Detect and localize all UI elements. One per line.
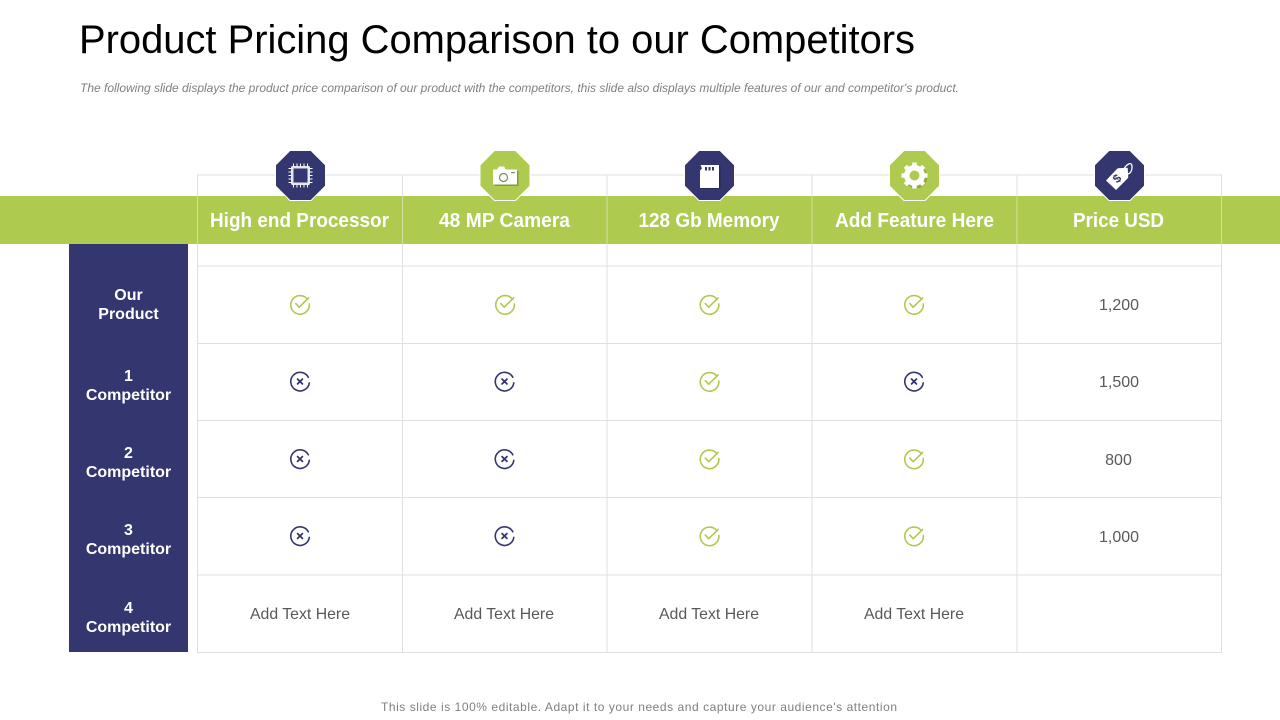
row: competitor 2 checks bbox=[700, 450, 923, 469]
footer note: This slide is 100% editable. Adapt it to your needs and capture your audience's attention bbox=[381, 700, 897, 714]
icon: price tag bbox=[1094, 150, 1144, 200]
table grid bbox=[198, 175, 1222, 652]
icon: gear bbox=[890, 150, 940, 200]
icon: price tag: $ bbox=[1110, 171, 1125, 186]
row label: competitor 1: 1 bbox=[124, 368, 133, 385]
row label: competitor 1: Competitor bbox=[86, 387, 171, 404]
row: our product marks bbox=[291, 296, 923, 314]
price: competitor 3: 1,000 bbox=[1099, 529, 1139, 546]
row: competitor 4 text: Add Text Here bbox=[454, 606, 554, 623]
row label: competitor 4: 4 bbox=[124, 600, 133, 617]
row label: our product: Product bbox=[98, 306, 159, 323]
row: competitor 4 text: Add Text Here bbox=[250, 606, 350, 623]
row: competitor 4 text: Add Text Here bbox=[864, 606, 964, 623]
row: competitor 2 crosses bbox=[291, 450, 514, 468]
price: our product: 1,200 bbox=[1099, 297, 1139, 314]
row: competitor 4 text bbox=[250, 606, 964, 623]
row label: our product: Our bbox=[114, 287, 143, 304]
title: Product Pricing Comparison to our Competitors bbox=[79, 18, 915, 62]
row: competitor 3 crosses bbox=[291, 527, 514, 545]
icon: memory card bbox=[684, 150, 734, 200]
row label: competitor 3: 3 bbox=[124, 522, 133, 539]
column heading: camera: 48 MP Camera bbox=[439, 210, 571, 232]
row: competitor 1 check bbox=[700, 373, 719, 391]
column heading: price: Price USD bbox=[1073, 210, 1164, 232]
subtitle: The following slide displays the product price comparison of our product with the competitors, this slide also displays multiple features of our and competitor's product. bbox=[80, 81, 959, 95]
price: competitor 1: 1,500 bbox=[1099, 374, 1139, 391]
column heading: feature: Add Feature Here bbox=[835, 210, 994, 232]
row label: competitor 4: Competitor bbox=[86, 619, 171, 636]
column heading: memory: 128 Gb Memory bbox=[638, 210, 780, 232]
icon: processor chip bbox=[276, 150, 326, 200]
price: competitor 2: 800 bbox=[1105, 452, 1132, 469]
row: competitor 4 text: Add Text Here bbox=[659, 606, 759, 623]
column heading: processor: High end Processor bbox=[210, 210, 389, 232]
row label: competitor 2: 2 bbox=[124, 445, 133, 462]
row label: competitor 2: Competitor bbox=[86, 464, 171, 481]
row: competitor 3 checks bbox=[700, 527, 923, 546]
row label panel bbox=[69, 244, 188, 652]
icon: camera bbox=[480, 150, 530, 200]
header band bbox=[0, 196, 1280, 244]
row: competitor 1 crosses bbox=[291, 372, 923, 391]
row label: competitor 3: Competitor bbox=[86, 541, 171, 558]
